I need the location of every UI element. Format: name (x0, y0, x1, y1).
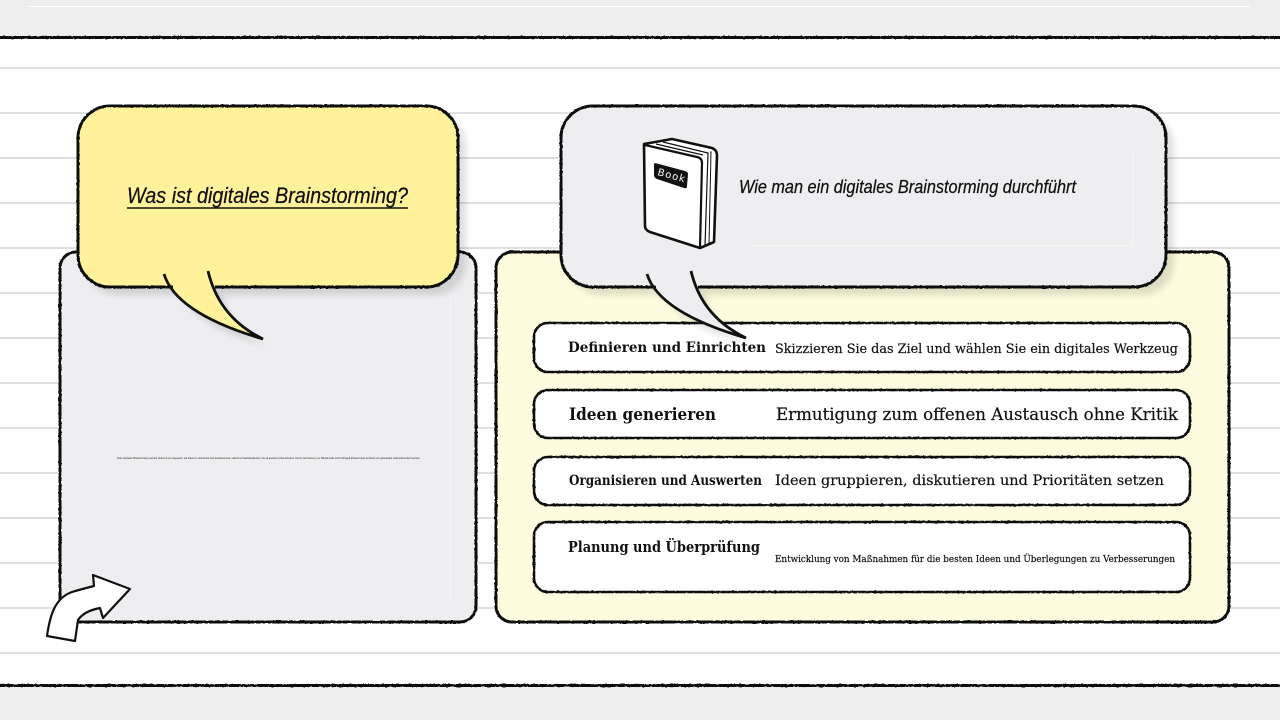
bottom band (0, 684, 1280, 720)
step 3: Ideen gruppieren, diskutieren und Prioritäten setzen (775, 473, 1164, 489)
step 3: Organisieren und Auswerten (569, 473, 762, 489)
step 2 (534, 390, 1190, 438)
panel: right steps (496, 252, 1229, 622)
heading: how to: Wie man ein digitales Brainstorming durchführt (739, 177, 1077, 197)
step 3 (534, 457, 1190, 505)
panel: left definition (60, 252, 476, 622)
top band (0, 0, 1280, 39)
step 4: Planung und Überprüfung (568, 537, 760, 556)
step 2: Ideen generieren (569, 405, 716, 425)
definition text: Beim digitalen Brainstorming werden Online-Tools eingesetzt, um Ideen zu entwickeln und auszutauschen, selbst bei Teammitgliedern, die an anderen Orten arbeiten. Durch die Nutzung von Whiteboards und Umfragen können Ideen sichtbar und gemeinsam weiterentwickelt werden. (117, 456, 420, 460)
step 1: Skizzieren Sie das Ziel und wählen Sie ein digitales Werkzeug (775, 342, 1178, 357)
heading: what is it: Was ist digitales Brainstorming? (127, 183, 409, 208)
step 4 (534, 522, 1190, 592)
speech bubble: yellow heading (78, 106, 466, 347)
step 1: Definieren und Einrichten (568, 340, 766, 356)
step 4: Entwicklung von Maßnahmen für die besten Ideen und Überlegungen zu Verbesserungen (775, 553, 1175, 565)
icon: book: Book (656, 167, 687, 185)
icon: curved arrow (47, 575, 130, 641)
icon: book (644, 139, 717, 248)
step 2: Ermutigung zum offenen Austausch ohne Kritik (776, 405, 1179, 425)
step 1 (534, 323, 1190, 372)
speech bubble: grey heading (561, 106, 1174, 346)
